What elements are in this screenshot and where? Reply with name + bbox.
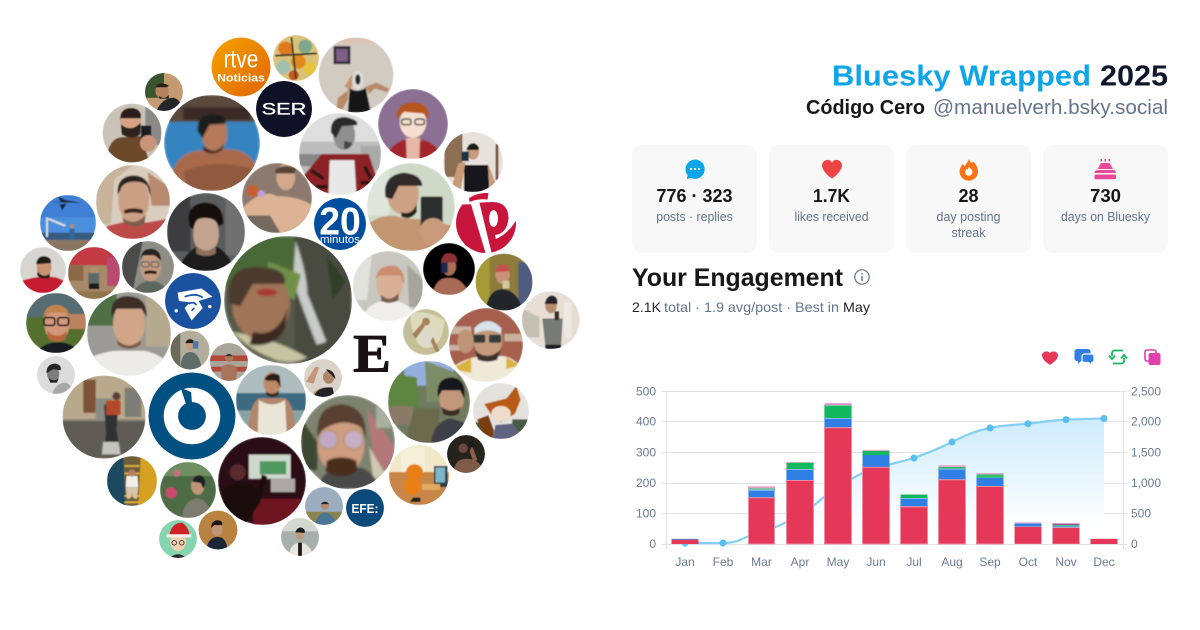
text: engagement summary: total · 1.9 avg/post · Best in: [664, 299, 839, 315]
avatar: small shirtless with red stripes: [210, 343, 248, 381]
icon: flame: [960, 159, 978, 181]
month labels: Mar: [751, 555, 772, 569]
text: engagement summary: May: [843, 299, 870, 315]
bar: Jun: [862, 450, 890, 544]
subtitle: display name and handle: Código Cero: [806, 97, 925, 119]
avatar: white tank top at sea: [236, 365, 306, 435]
avatar: small man in blue shirt city: [305, 487, 343, 525]
panel: days on Bluesky stat: 730: [1090, 186, 1121, 206]
avatar: rtve Noticias logo: Noticias: [217, 72, 265, 84]
cumulative area: [685, 418, 1104, 544]
panel: posts and replies stat: posts · replies: [656, 209, 733, 224]
right axis labels: 500: [1131, 506, 1151, 520]
avatar: glasses man with mustache: [122, 241, 174, 293]
avatar: small dark shirtless man: [447, 435, 485, 473]
title: Bluesky Wrapped 2025: 2025: [1100, 60, 1168, 92]
bar: Mar: [748, 486, 775, 544]
month labels: [675, 555, 1115, 569]
bar: Oct: [1014, 522, 1042, 544]
panel: day posting streak stat: [906, 145, 1031, 253]
avatar: black and white bearded man: [37, 356, 75, 394]
avatar: blue map logo: [165, 273, 221, 329]
title: Bluesky Wrapped 2025: Bluesky Wrapped: [832, 60, 1091, 92]
month labels: Jun: [866, 555, 886, 569]
avatar: small mirror selfie beige: [403, 309, 449, 355]
avatar: comic illustration: [273, 35, 319, 81]
icon: replies bubbles: [1074, 349, 1094, 366]
bar: May: [824, 403, 852, 544]
panel: day posting streak stat: day posting: [936, 209, 1000, 224]
right axis labels: 2,000: [1131, 414, 1161, 428]
month labels: Apr: [791, 555, 809, 569]
avatar: dark curly hair portrait: [167, 193, 245, 271]
avatar: 20 minutos logo: [314, 198, 366, 250]
avatar: man with white beanie brick wall: [449, 308, 523, 382]
avatar: dark stage presentation: [218, 437, 306, 525]
avatar: rtve Noticias logo: rtve: [224, 46, 258, 73]
avatar: man among flowers: [68, 247, 120, 299]
avatar: brown man with scarf: [198, 510, 238, 550]
bar: Apr: [786, 462, 814, 544]
panel: posts and replies stat: 776 · 323: [656, 186, 732, 206]
avatar: man among plants: [160, 462, 216, 518]
avatar: cartoon with santa hat: [159, 520, 197, 558]
right axis labels: 1,500: [1131, 446, 1161, 460]
avatar: waterfall portrait: [224, 236, 352, 364]
month labels: Feb: [713, 555, 734, 569]
avatar: pixel art charmander: [389, 445, 449, 505]
avatar: man on colorful stairs: [107, 456, 157, 506]
right axis labels: [1131, 384, 1161, 551]
avatar: Amsterdam canal portrait: [388, 361, 470, 443]
avatar: man in white tee with pink hair: [353, 251, 423, 321]
panel: days on Bluesky stat: [1043, 145, 1168, 253]
avatar: bearded man mirror selfie: [102, 104, 162, 162]
avatar: small red shirt man: [20, 247, 66, 293]
icon: speech bubble: [685, 160, 705, 179]
panel: avatar bubble cluster: [20, 35, 580, 558]
avatar: man in red flannel, black and white: [299, 113, 381, 195]
icon: likes heart: [1042, 351, 1058, 365]
left axis labels: [636, 384, 656, 551]
bar: Sep: [976, 473, 1004, 544]
panel: likes received stat: [769, 145, 894, 253]
bar: Nov: [1052, 524, 1080, 544]
bar: Jul: [900, 494, 928, 544]
text: engagement summary: 2.1K: [632, 299, 662, 315]
panel: day posting streak stat: streak: [952, 225, 986, 240]
avatar: rtve Noticias logo: [212, 38, 270, 96]
avatar: small man lying down: [304, 359, 342, 397]
left axis labels: 100: [636, 506, 656, 520]
right axis labels: 0: [1131, 537, 1138, 551]
month labels: May: [827, 555, 849, 569]
right axis labels: 2,500: [1131, 384, 1161, 398]
avatar: 20 minutos logo: 20: [319, 200, 361, 243]
avatar: 20 minutos logo: minutos: [320, 234, 361, 246]
avatar: small man with backpack mirror: [170, 330, 210, 370]
panel: posts and replies stat: [632, 145, 757, 253]
left axis labels: 400: [636, 414, 656, 428]
avatar: EFE logo: EFE:: [352, 501, 378, 516]
avatar: red cap mirror selfie: [423, 243, 475, 295]
avatar: P logo: [456, 193, 516, 253]
panel: days on Bluesky stat: days on Bluesky: [1061, 209, 1150, 224]
avatar: man with large smartphone selfie: [367, 163, 455, 251]
avatar: small man relaxing: [145, 73, 183, 111]
avatar: man in white coat: [281, 518, 319, 556]
icon: reposts arrows: [1109, 350, 1127, 364]
avatar: person at doorway street: [62, 376, 146, 458]
avatar: purple cartoon portrait: [378, 89, 448, 159]
right axis labels: 1,000: [1131, 476, 1161, 490]
cumulative line: [682, 415, 1108, 546]
month labels: Nov: [1055, 555, 1077, 569]
avatar: plane on beach: [40, 195, 96, 251]
avatar: young man white tee: [87, 292, 171, 376]
month labels: Aug: [941, 555, 963, 569]
avatar: El Espanol E logo: E: [353, 324, 391, 384]
icon: info: [855, 270, 869, 284]
avatar: man with mustache: [96, 165, 170, 239]
left axis labels: 300: [636, 446, 656, 460]
bar: Jan: [672, 539, 698, 544]
panel: likes received stat: likes received: [794, 209, 868, 224]
icon: quotes copies: [1145, 350, 1160, 365]
avatar: pink hair elevator selfie: [476, 254, 532, 310]
month labels: Oct: [1019, 555, 1038, 569]
chart: monthly engagement stacked bars with cumulative line: [636, 384, 1161, 569]
left axis labels: 500: [636, 384, 656, 398]
month labels: Jul: [906, 555, 922, 569]
avatar: SER logo: [256, 81, 312, 137]
stacked bars: [672, 403, 1118, 544]
grid lines: [662, 391, 1127, 549]
bar: Aug: [938, 465, 966, 544]
avatar: EFE logo: [346, 489, 384, 527]
avatar: man in grey shirt mirror: [522, 291, 580, 349]
avatar: man in black tank mirror: [443, 132, 503, 192]
panel: likes received stat: 1.7K: [813, 186, 850, 206]
avatar: SER logo: SER: [262, 101, 306, 119]
avatar: man with round glasses: [301, 395, 395, 489]
avatar: blue ring logo: [148, 372, 236, 460]
avatar: red beard glasses: [26, 293, 86, 353]
subtitle: display name and handle: [806, 97, 1168, 119]
heading: Your Engagement: Your Engagement: [632, 264, 844, 292]
panel: day posting streak stat: 28: [958, 186, 978, 206]
month labels: Sep: [979, 555, 1001, 569]
avatar: man in pool: [164, 95, 260, 191]
bar: Dec: [1090, 539, 1118, 544]
icon: birthday cake: [1094, 159, 1116, 179]
icon: heart: [822, 160, 842, 178]
month labels: Dec: [1093, 555, 1115, 569]
month labels: Jan: [675, 555, 695, 569]
legend: likes, replies, reposts, quotes: [1042, 349, 1160, 366]
avatar: ghost mask flexing: [318, 38, 394, 112]
left axis labels: 0: [649, 537, 656, 551]
avatar: El Espanol E logo: [354, 336, 388, 372]
left axis labels: 200: [636, 476, 656, 490]
subtitle: display name and handle: @manuelverh.bsky.social: [933, 97, 1168, 119]
avatar: cartoon fox: [473, 383, 529, 439]
avatar: shirtless man with sticker: [242, 163, 312, 233]
